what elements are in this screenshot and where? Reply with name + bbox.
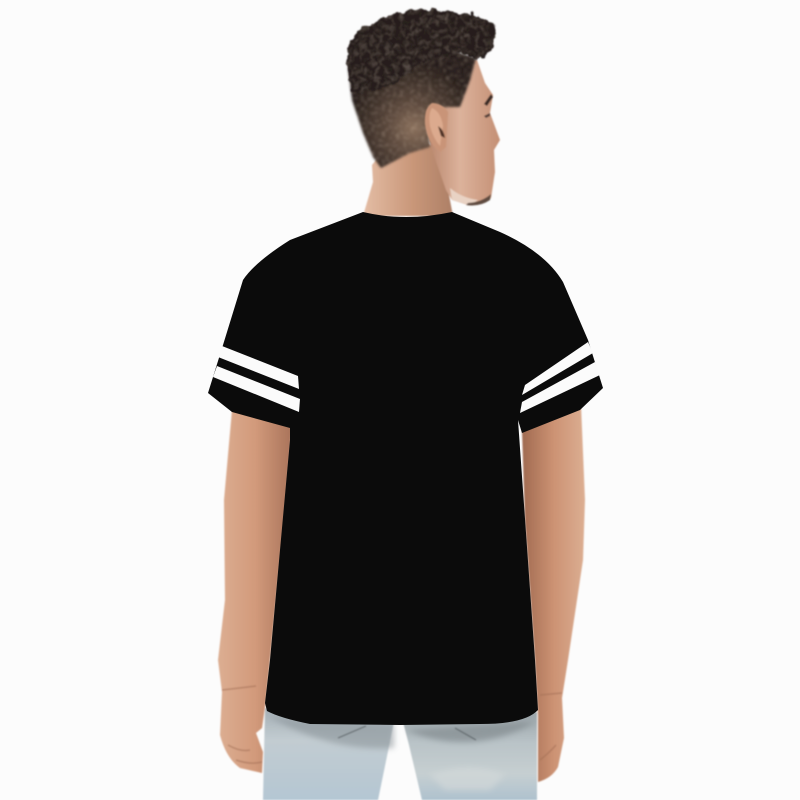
ear [425,103,448,152]
hair: curly top [344,6,497,93]
face profile [420,60,500,205]
head and neck skin [363,60,500,216]
shirt body and sleeves [208,212,603,725]
finger creases [222,686,262,763]
jeans [263,708,537,800]
hair: fade [346,52,478,170]
product photo: man from behind wearing a black striped-sleeve T-shirt [208,6,603,800]
jaw highlight and beard [450,188,478,205]
left arm and hand [218,410,292,773]
eye [484,113,490,118]
right sleeve stripes [520,342,600,413]
neck [363,130,453,216]
right arm and hand [522,405,585,782]
black T-shirt [208,212,603,725]
hem shadow and pocket creases [268,716,394,748]
eyebrow [484,94,493,106]
left sleeve stripes [213,346,300,412]
knuckle crease [540,693,562,760]
